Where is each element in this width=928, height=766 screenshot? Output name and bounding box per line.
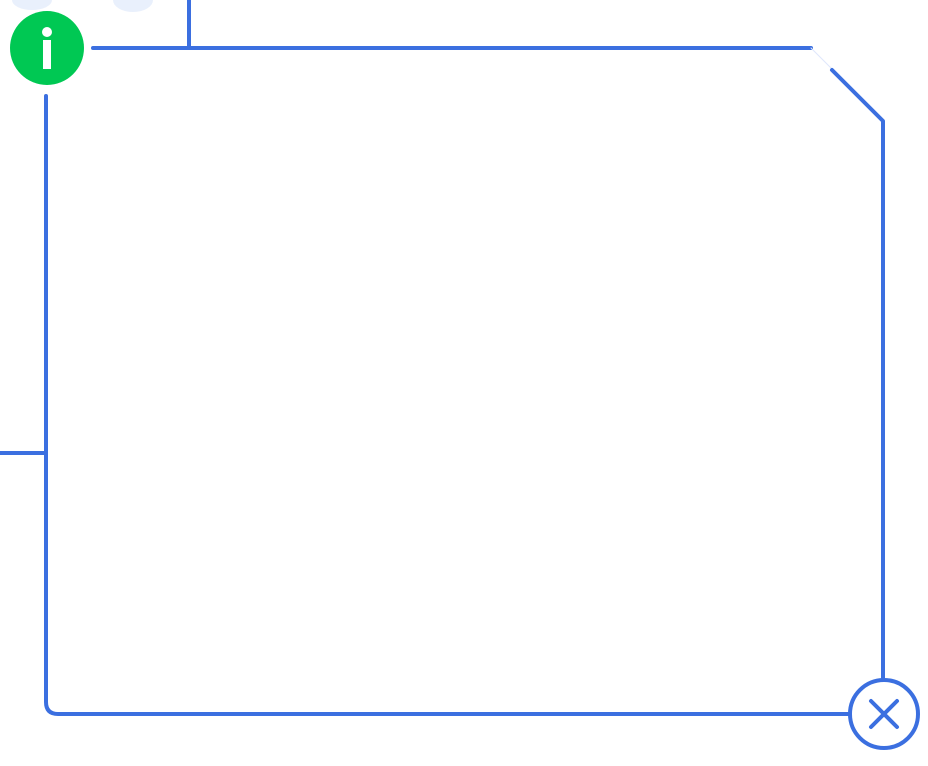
icon: info [10,11,84,85]
panel frame [46,48,883,714]
connector line left [0,451,46,455]
decorative light blobs [12,0,153,12]
icon: close [850,680,918,748]
connector line top [187,0,191,48]
